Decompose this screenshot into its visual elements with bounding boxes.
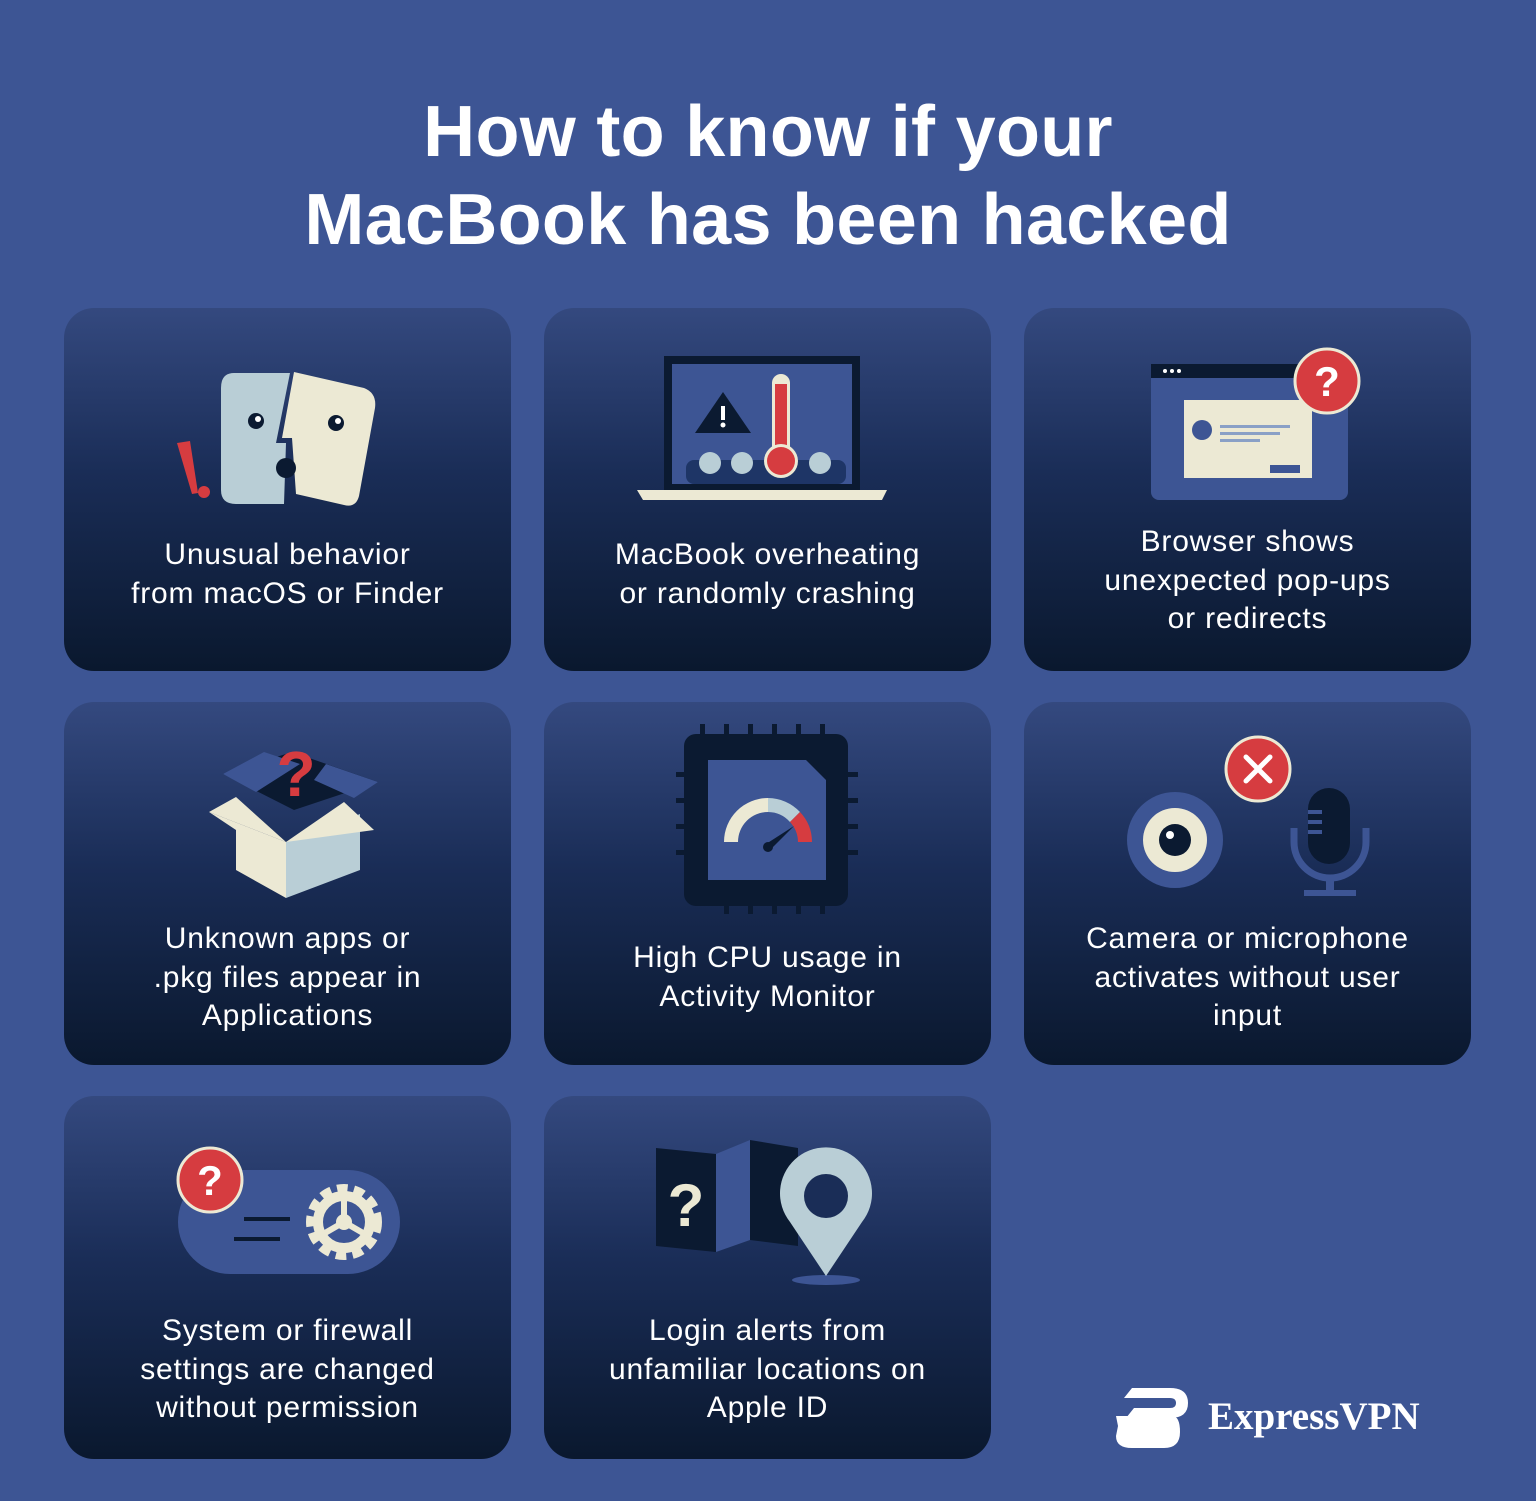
label — [1104, 525, 1391, 635]
icon: browser with question: ? — [1314, 358, 1340, 405]
label: or randomly crashing — [619, 576, 916, 610]
label: MacBook overheating — [615, 538, 920, 571]
label: or redirects — [1168, 602, 1327, 635]
panel: unknown apps — [64, 702, 511, 1065]
label — [154, 922, 421, 1032]
label — [633, 941, 902, 1012]
icon: finder faces — [177, 372, 376, 506]
icon: toggle gear: ? — [197, 1157, 223, 1204]
label: unfamiliar locations on — [609, 1352, 926, 1386]
panel: camera microphone — [1024, 702, 1471, 1065]
label: Unusual behavior — [164, 538, 411, 571]
icon: map pin: ? — [668, 1172, 704, 1239]
panel: high CPU — [544, 702, 991, 1065]
label: from macOS or Finder — [131, 576, 444, 610]
label — [131, 538, 444, 610]
title: MacBook has been hacked — [304, 180, 1232, 260]
label: unexpected pop-ups — [1104, 564, 1391, 596]
icon: open box — [209, 738, 378, 898]
label: Camera or microphone — [1086, 922, 1409, 955]
label: System or firewall — [162, 1314, 413, 1347]
title — [304, 92, 1232, 260]
label: without permission — [156, 1391, 419, 1424]
label: .pkg files appear in — [154, 960, 421, 994]
label: Browser shows — [1141, 525, 1354, 558]
label: Applications — [202, 999, 373, 1032]
label: Apple ID — [707, 1391, 828, 1424]
label: settings are changed — [140, 1352, 435, 1386]
logo: ExpressVPN — [1116, 1388, 1420, 1448]
icon: browser with question — [1151, 348, 1360, 500]
label: Login alerts from — [649, 1314, 886, 1347]
label — [609, 1314, 926, 1424]
panel: overheating — [544, 308, 991, 671]
logo: ExpressVPN: ExpressVPN — [1208, 1395, 1420, 1438]
panel: browser pop-ups — [1024, 308, 1471, 671]
title: How to know if your — [423, 92, 1113, 172]
label: Unknown apps or — [165, 922, 410, 955]
panel: settings changed — [64, 1096, 511, 1459]
icon: map pin — [656, 1140, 872, 1285]
icon: laptop thermometer — [637, 356, 887, 500]
label: High CPU usage in — [633, 941, 902, 974]
panel: login alerts — [544, 1096, 991, 1459]
icon: camera mic — [1127, 736, 1370, 896]
label: activates without user — [1094, 960, 1401, 994]
label: input — [1213, 999, 1282, 1032]
icon: toggle gear — [176, 1146, 400, 1274]
icon: open box: ? — [276, 738, 316, 810]
icon: cpu gauge — [676, 724, 858, 914]
panel: unusual behavior — [64, 308, 511, 671]
label: Activity Monitor — [659, 980, 876, 1012]
label — [140, 1314, 435, 1424]
label — [1086, 922, 1409, 1032]
label — [615, 538, 920, 610]
